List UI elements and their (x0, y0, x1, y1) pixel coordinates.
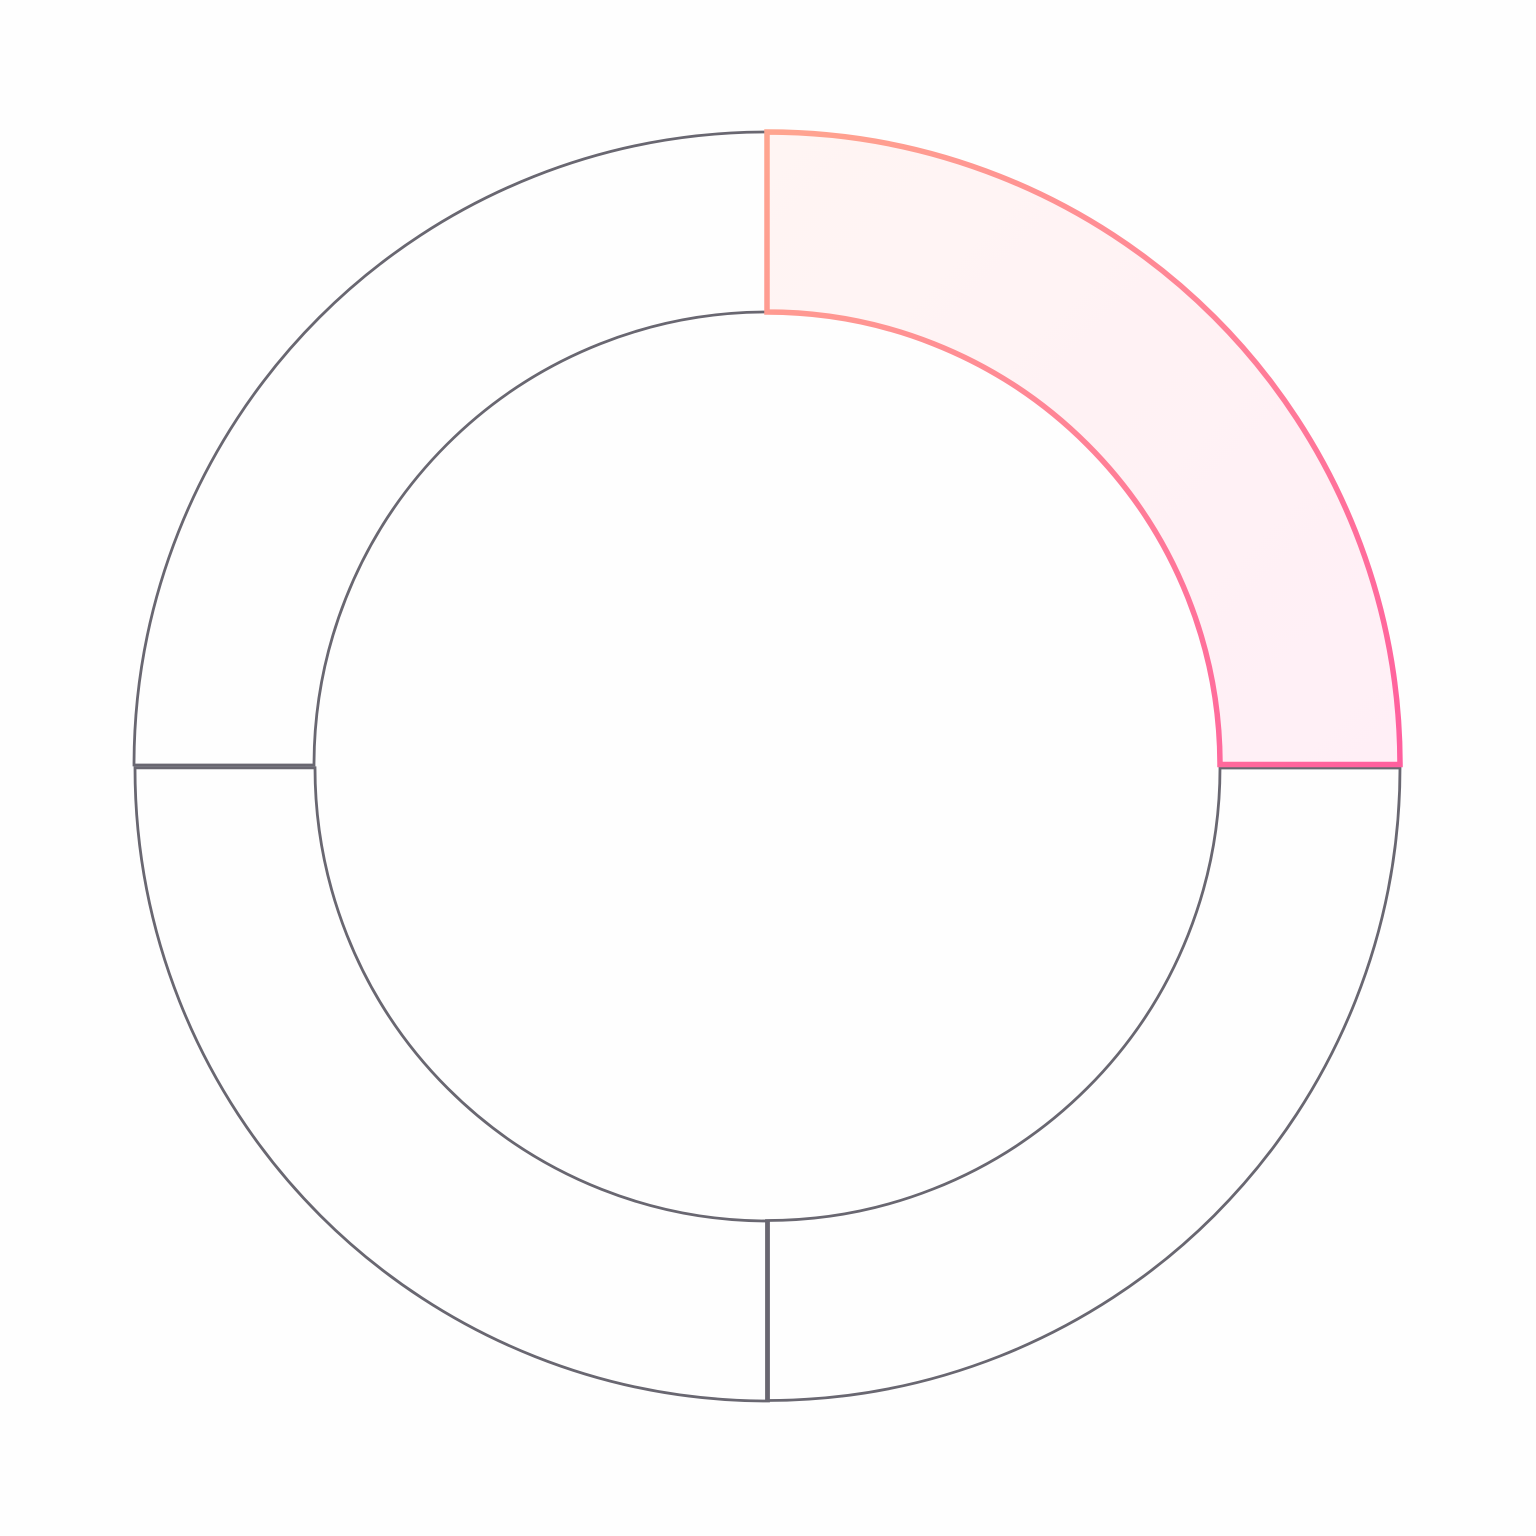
segment: top left (134, 132, 767, 765)
segment: bottom right (766, 768, 1400, 1401)
segment: highlighted top right (767, 132, 1400, 764)
segment: bottom left (135, 768, 768, 1401)
